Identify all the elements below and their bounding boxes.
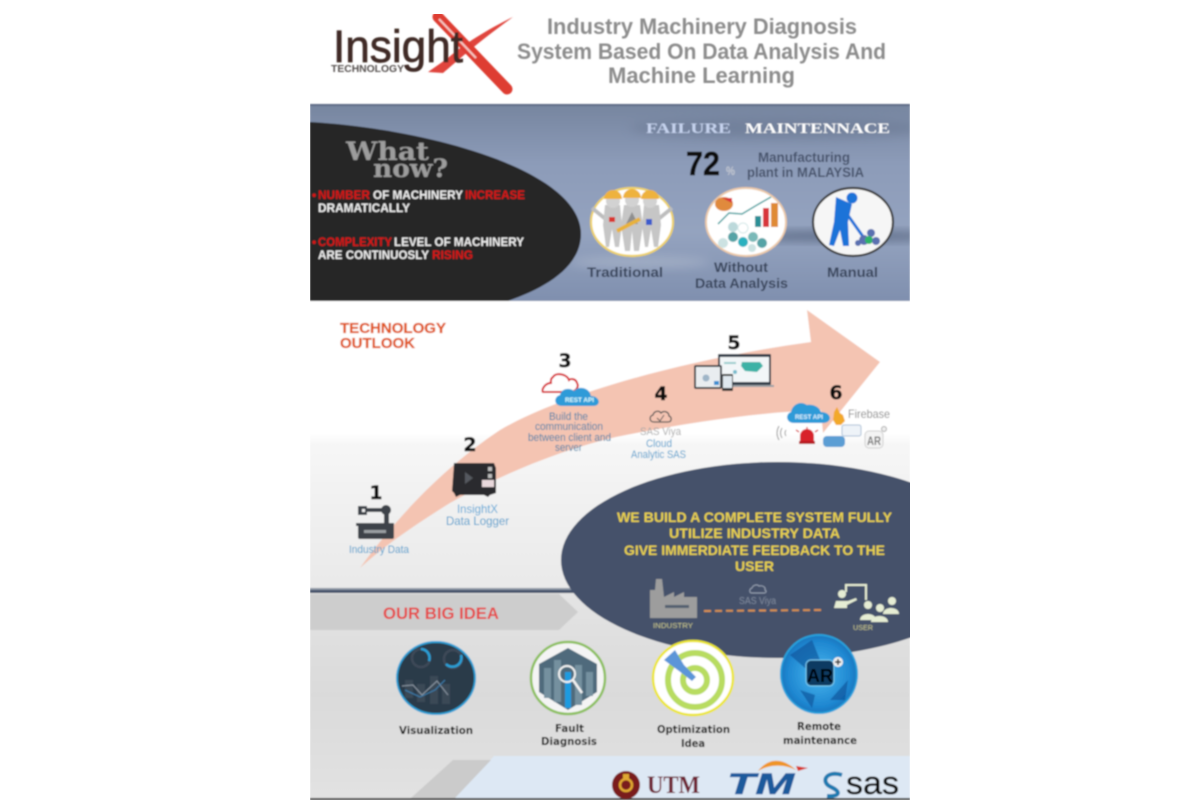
- label: fault diagnosis: Diagnosis: [541, 735, 597, 748]
- icon: chart without data analysis: [706, 188, 786, 256]
- step 4: sas viya cloud analytic: Analytic SAS: [631, 449, 686, 461]
- heading: what now: [344, 140, 448, 178]
- step 5: dashboards on devices: [694, 332, 774, 391]
- icon: optimization target: [653, 641, 733, 715]
- step 6: firebase and remote services: REST API: [795, 415, 823, 421]
- text block: machinery problems: COMPLEXITY: [318, 235, 392, 249]
- logo: UTM: [612, 771, 700, 799]
- label: remote maintenance: [783, 720, 857, 747]
- label: without data analysis: Without: [714, 259, 768, 275]
- title: System Based On Data Analysis And: [517, 39, 886, 64]
- step 2: insightx data logger: 2: [463, 434, 477, 456]
- label: manual: Manual: [827, 264, 878, 280]
- title: Machine Learning: [608, 63, 795, 88]
- logo: InsightX Technology: [331, 17, 513, 89]
- label: optimization idea: Idea: [681, 737, 705, 750]
- text block: machinery problems: INCREASE: [465, 188, 525, 202]
- heading: failure maintenance: MAINTENNACE: [745, 121, 890, 137]
- step 3: client server communication: Build the: [549, 411, 588, 423]
- logo: InsightX Technology: Insight: [333, 21, 463, 72]
- panel: complete system callout: [560, 461, 910, 659]
- statistic: 72 percent: %: [726, 164, 735, 178]
- step 1: industry data: [349, 482, 410, 556]
- step 2: insightx data logger: [446, 434, 509, 528]
- logo: SAS: sas: [846, 765, 899, 800]
- step 2: insightx data logger: InsightX: [457, 502, 498, 516]
- text block: machinery problems: LEVEL OF MACHINERY: [394, 235, 524, 249]
- label: traditional: Traditional: [587, 264, 663, 280]
- data flow via sas viya: [704, 585, 821, 611]
- text block: machinery problems: OF MACHINERY: [373, 188, 463, 202]
- heading: technology outlook: [339, 322, 446, 350]
- label: without data analysis: [695, 259, 788, 291]
- statistic: 72 percent: Manufacturing: [758, 150, 850, 165]
- icon: users: USER: [853, 625, 873, 632]
- panel: lower grey background: [310, 588, 910, 800]
- step 6: firebase and remote services: [777, 382, 890, 448]
- icon: augmented reality: [781, 635, 857, 713]
- label: remote maintenance: maintenance: [783, 734, 857, 747]
- banner: our big idea: OUR BIG IDEA: [383, 604, 499, 623]
- text block: system statement: WE BUILD A COMPLETE SYSTEM FULLY: [617, 509, 893, 525]
- step 3: client server communication: REST API: [565, 398, 594, 404]
- icon: factory: [650, 579, 697, 630]
- text block: machinery problems: ARE CONTINUOSLY: [318, 248, 429, 262]
- logo: TM: [727, 761, 808, 800]
- icon: users: [834, 584, 899, 632]
- text block: machinery problems: •: [312, 235, 316, 249]
- heading: failure maintenance: FAILURE: [646, 121, 731, 137]
- text block: system statement: UTILIZE INDUSTRY DATA: [669, 525, 840, 541]
- header: logo and title: [331, 14, 886, 89]
- panel: failure maintenance banner: [310, 104, 960, 302]
- title: Industry Machinery Diagnosis: [547, 14, 857, 39]
- step 3: client server communication: [528, 350, 611, 454]
- heading: technology outlook: OUTLOOK: [340, 335, 415, 352]
- label: optimization idea: [657, 723, 730, 750]
- statistic: 72 percent: 72: [686, 145, 720, 182]
- text block: machinery problems: •: [312, 188, 316, 202]
- step 4: sas viya cloud analytic: [631, 383, 686, 461]
- step 4: sas viya cloud analytic: Cloud: [646, 438, 672, 450]
- step 3: client server communication: 3: [558, 350, 572, 372]
- label: without data analysis: Data Analysis: [695, 275, 788, 291]
- step 4: sas viya cloud analytic: 4: [654, 383, 668, 405]
- icon: traditional workers: [591, 188, 673, 256]
- step 6: firebase and remote services: AR: [867, 434, 881, 448]
- text block: system statement: GIVE IMMERDIATE FEEDBACK TO THE: [624, 542, 885, 558]
- icon: augmented reality: AR: [807, 666, 833, 686]
- step 3: client server communication: between client and: [528, 432, 611, 444]
- step 1: industry data: Industry Data: [349, 544, 410, 556]
- label: remote maintenance: Remote: [797, 720, 841, 733]
- panel: what now dark ellipse: [310, 122, 581, 302]
- text block: machinery problems: [312, 188, 525, 262]
- panel: technology outlook: [310, 301, 910, 589]
- statistic: 72 percent: plant in MALAYSIA: [747, 165, 864, 180]
- step 5: dashboards on devices: 5: [727, 332, 741, 354]
- arrow: growth path: [360, 310, 880, 568]
- heading: failure maintenance: [646, 122, 890, 134]
- step 1: industry data: 1: [369, 482, 383, 504]
- label: fault diagnosis: [541, 722, 597, 748]
- panel: sponsor logo strip: [310, 756, 910, 800]
- data flow via sas viya: SAS Viya: [739, 596, 776, 607]
- step 4: sas viya cloud analytic: SAS Viya: [640, 426, 682, 438]
- text block: machinery problems: DRAMATICALLY: [318, 201, 410, 215]
- text block: machinery problems: RISING: [432, 248, 473, 262]
- statistic: 72 percent: [686, 150, 864, 180]
- step 6: firebase and remote services: Firebase: [848, 407, 890, 421]
- logo: InsightX Technology: TECHNOLOGY: [331, 64, 404, 75]
- icon: factory: INDUSTRY: [653, 623, 693, 630]
- text block: machinery problems: NUMBER: [318, 188, 370, 202]
- logo: UTM: UTM: [647, 772, 700, 799]
- step 2: insightx data logger: Data Logger: [446, 514, 509, 528]
- icon: manual worker: [813, 188, 893, 256]
- label: fault diagnosis: Fault: [555, 722, 584, 735]
- step 6: firebase and remote services: 6: [829, 382, 843, 404]
- heading: what now: What: [345, 137, 430, 166]
- text block: system statement: [617, 509, 893, 574]
- label: optimization idea: Optimization: [657, 723, 730, 736]
- icon: fault diagnosis: [531, 642, 605, 714]
- text block: system statement: USER: [735, 558, 774, 574]
- banner: our big idea: [310, 594, 578, 630]
- label: visualization: Visualization: [399, 724, 473, 737]
- heading: technology outlook: TECHNOLOGY: [340, 320, 446, 337]
- step 3: client server communication: communication: [535, 421, 603, 433]
- title: [517, 14, 886, 88]
- icon: visualization: [397, 642, 475, 714]
- logo: SAS: [825, 765, 899, 800]
- heading: what now: now?: [373, 154, 448, 183]
- step 3: client server communication: server: [555, 442, 582, 454]
